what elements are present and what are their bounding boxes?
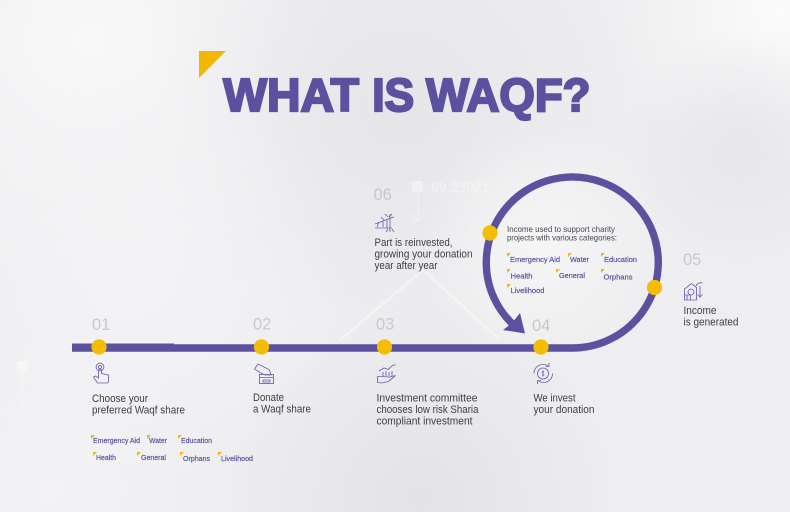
step 05: Income [684, 305, 716, 317]
tag list: income categories: Health [510, 272, 532, 280]
timeline and income circle arrow [72, 177, 658, 348]
step 01 [91, 316, 253, 463]
tag list: step 01 categories [91, 435, 253, 463]
title [223, 69, 591, 121]
step 04: your donation [534, 404, 594, 416]
tag list: income categories: Water [570, 255, 589, 264]
tag list: step 01 categories: Livelihood [221, 454, 253, 463]
title: WAQF? [426, 69, 590, 121]
step 04: 04 [532, 317, 550, 335]
tag list: income categories: Livelihood [510, 286, 544, 295]
step 04: We invest [534, 392, 576, 404]
tag list: income categories: Orphans [604, 272, 633, 282]
tag list: step 01 categories: Water [149, 436, 167, 445]
title: WHAT [223, 69, 359, 121]
step 03: chooses low risk Sharia [376, 404, 478, 416]
income description: projects with various categories: [507, 234, 617, 242]
tag list: income categories: General [559, 271, 585, 280]
icon: donation box [254, 364, 274, 384]
tag list: income categories: Emergency Aid [510, 255, 560, 264]
step 04 [532, 317, 594, 416]
step 02: Donate [253, 392, 284, 404]
icon: money cycle [534, 363, 552, 384]
step 05: 05 [683, 251, 701, 269]
step 03: Investment committee [376, 392, 478, 404]
tag list: step 01 categories: Health [96, 453, 116, 462]
tag list: step 01 categories: Emergency Aid [93, 436, 140, 445]
background: 69.23021 [431, 179, 490, 195]
milestone dots [91, 225, 662, 355]
income description: Income used to support charity [507, 225, 616, 234]
income description [507, 225, 617, 242]
step 05: is generated [684, 316, 738, 328]
icon: plant with roots [375, 214, 394, 232]
step 06: growing your donation [374, 248, 472, 260]
step 01: Choose your [92, 393, 148, 405]
step 02: 02 [253, 316, 271, 334]
title: IS [372, 69, 414, 121]
step 01: 01 [92, 316, 110, 334]
step 02: a Waqf share [253, 404, 311, 416]
tag list: income categories [507, 253, 637, 295]
tag list: step 01 categories: General [141, 453, 166, 462]
step 03: compliant investment [376, 416, 472, 428]
icon: hand with growth chart [378, 365, 396, 383]
step 06: year after year [374, 260, 438, 272]
step 06: Part is reinvested, [374, 237, 452, 249]
step 06: 06 [374, 186, 392, 204]
icon: house with income [684, 283, 702, 300]
step 01: preferred Waqf share [92, 404, 185, 416]
tag list: income categories: Education [604, 255, 637, 264]
step 05 [683, 251, 738, 328]
step 03: 03 [376, 316, 394, 334]
step 03 [376, 316, 478, 428]
icon: hand tapping [94, 363, 108, 383]
step 06 [374, 186, 472, 272]
step 02 [253, 316, 311, 416]
title accent triangle [199, 51, 226, 78]
tag list: step 01 categories: Orphans [183, 454, 210, 463]
tag list: step 01 categories: Education [181, 436, 212, 445]
